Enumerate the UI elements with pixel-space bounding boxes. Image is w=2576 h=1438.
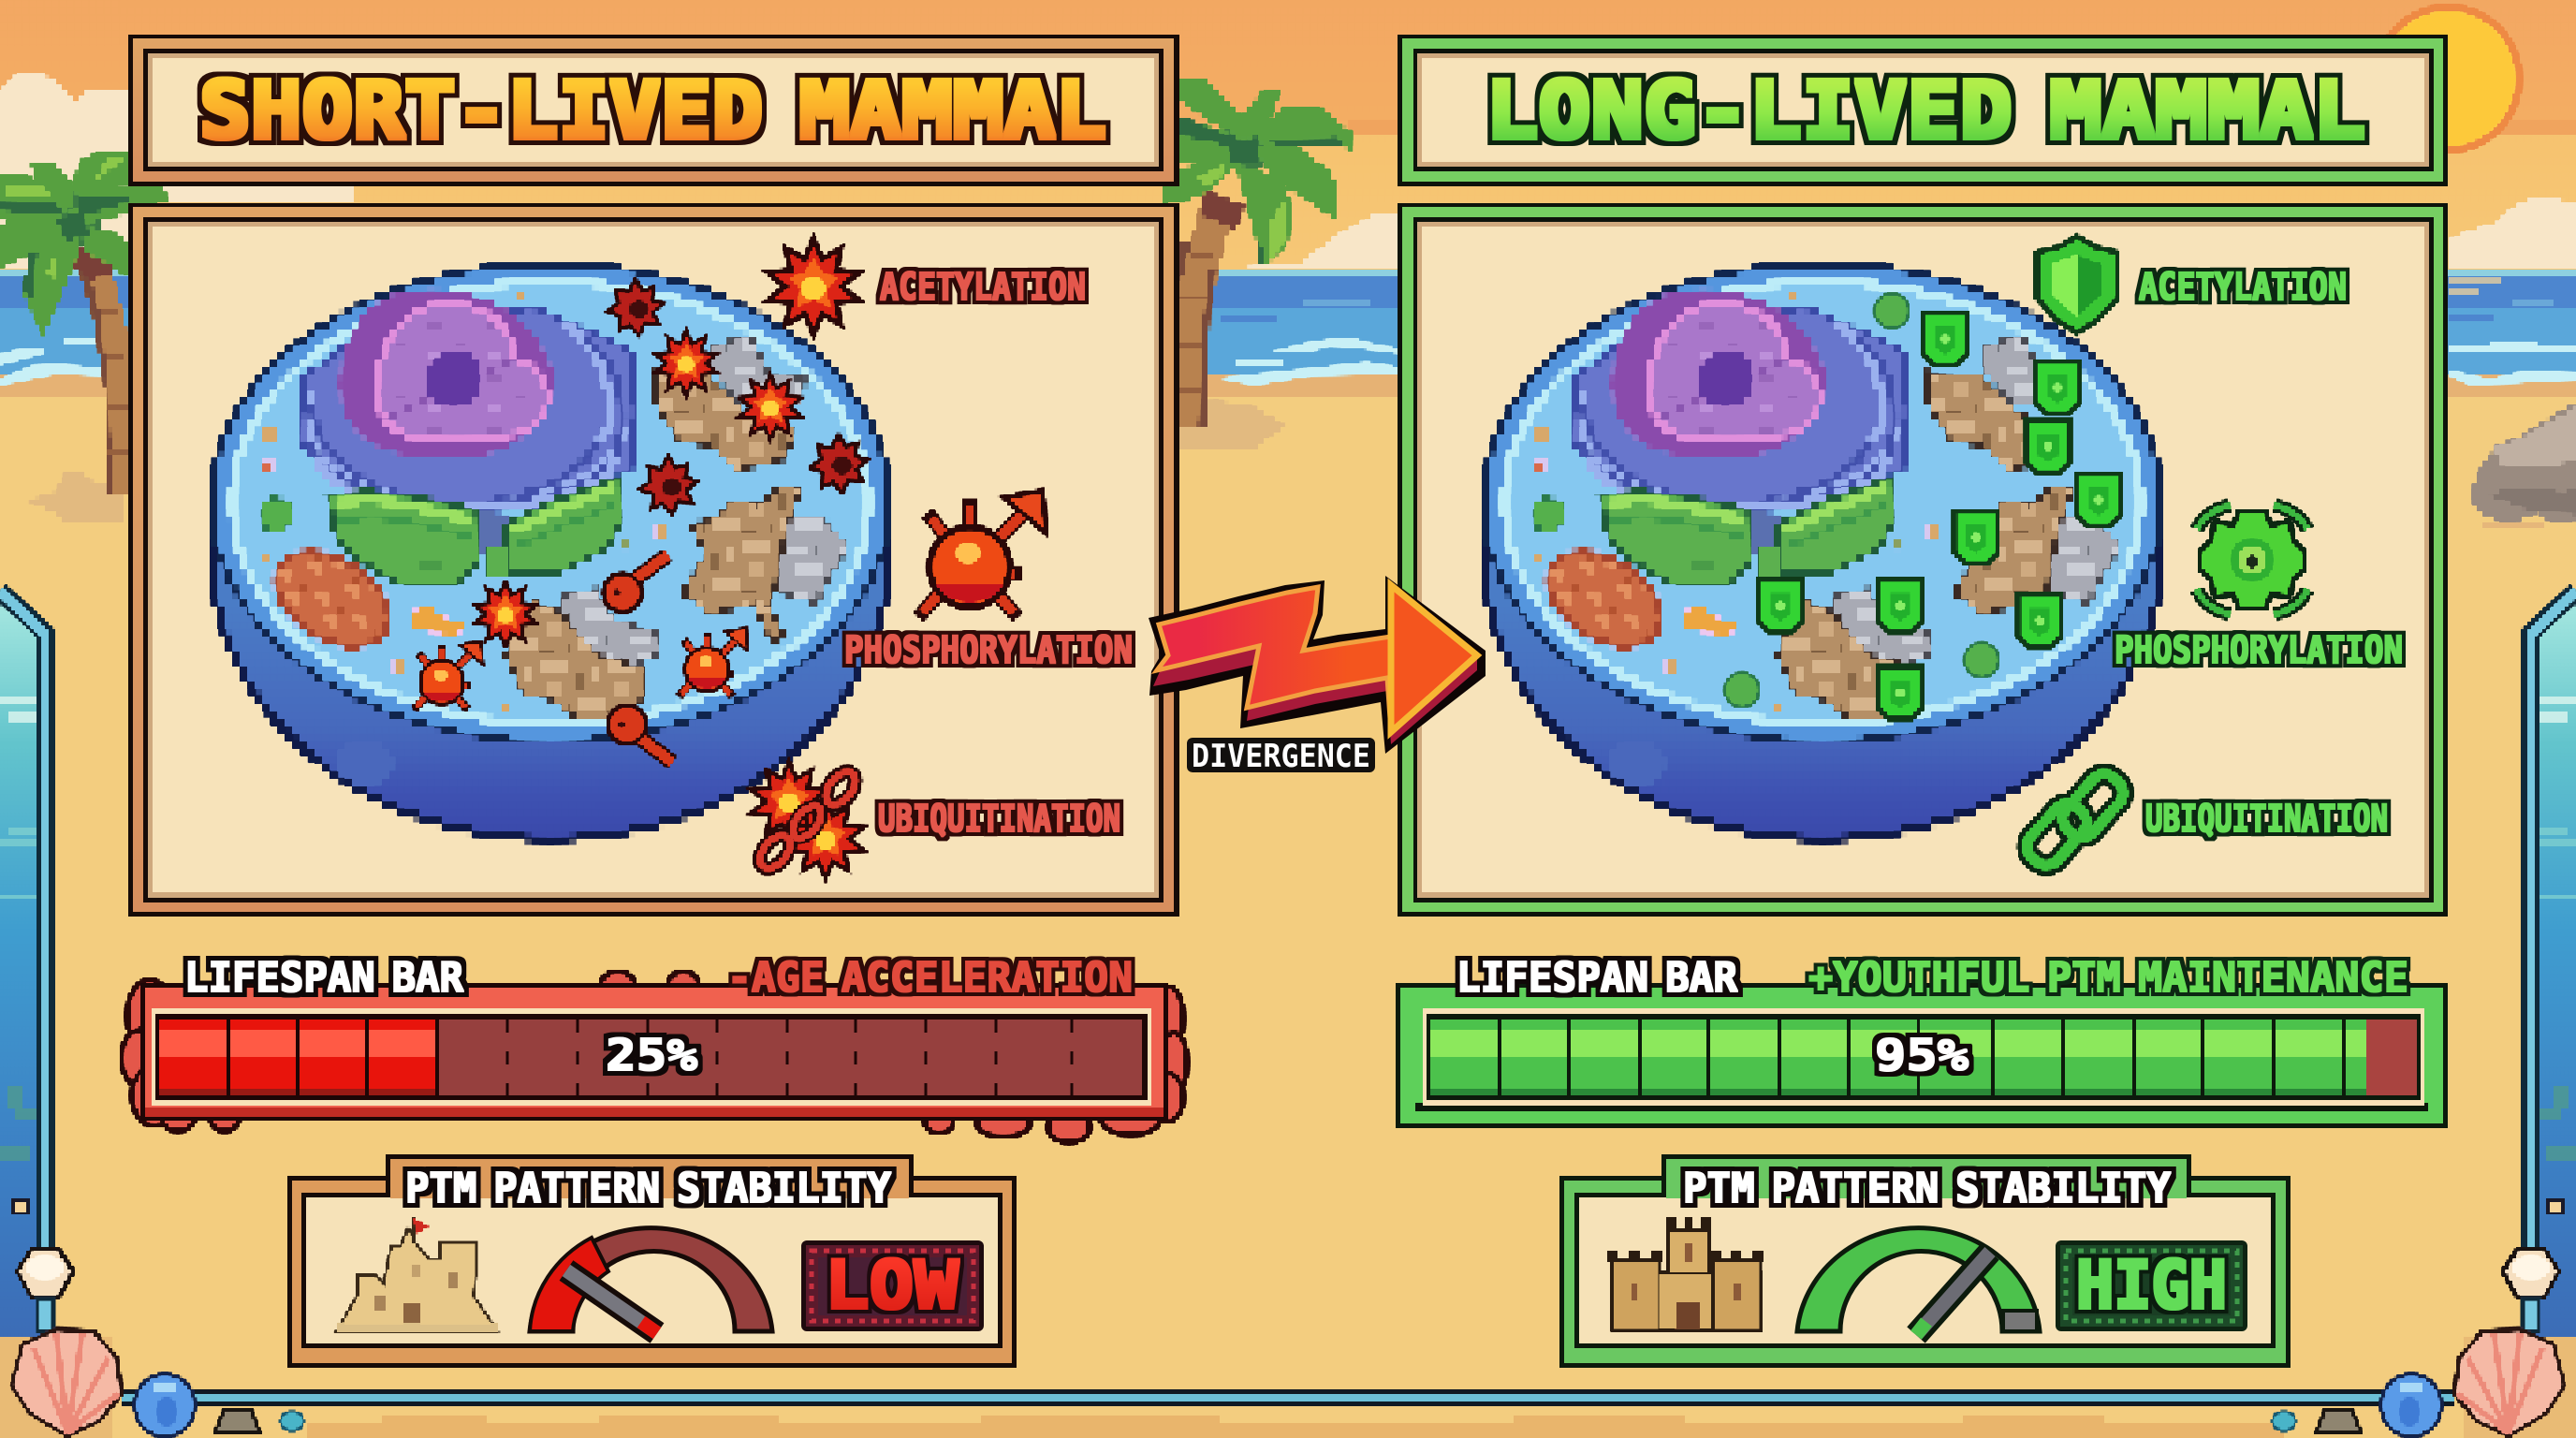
label: acetylation: ACETYLATION xyxy=(880,266,1086,309)
cell illustration: damaged xyxy=(212,264,889,839)
label: age acceleration: -AGE ACCELERATION xyxy=(727,954,1133,1002)
label: ubiquitination: UBIQUITINATION xyxy=(878,798,1120,841)
label: phosphorylation: PHOSPHORYLATION xyxy=(2115,629,2403,672)
label: phosphorylation: PHOSPHORYLATION xyxy=(844,629,1133,672)
title: long-lived mammal: LONG-LIVED MAMMAL xyxy=(1486,65,2365,156)
badge: high xyxy=(2056,1240,2247,1331)
value: 25%: 25% xyxy=(606,1030,697,1080)
clouds xyxy=(0,75,2576,267)
title: long-lived mammal xyxy=(1398,35,2448,186)
bottom water rail xyxy=(122,1389,2454,1406)
value: 95%: 95% xyxy=(1875,1030,1969,1080)
lifespan bar: long-lived xyxy=(1396,954,2448,1128)
icon: acetylation burst xyxy=(768,240,858,333)
label: ubiquitination: UBIQUITINATION xyxy=(2145,798,2388,841)
panel: long-lived cell xyxy=(1398,203,2448,917)
badge: low: LOW xyxy=(825,1247,959,1324)
title: short-lived mammal xyxy=(128,35,1179,186)
gauge: low xyxy=(530,1228,772,1333)
panel: short-lived cell xyxy=(128,203,1179,917)
panel: PTM stability low xyxy=(287,1154,1017,1368)
heading: PTM PATTERN STABILITY xyxy=(405,1165,891,1212)
icon: shield xyxy=(2037,237,2117,332)
label: acetylation: ACETYLATION xyxy=(2139,266,2347,309)
frame lumps xyxy=(122,972,1187,1142)
filled segments xyxy=(159,1020,435,1095)
icon: crumbling sandcastle xyxy=(337,1218,497,1331)
arrow: divergence xyxy=(1149,576,1486,754)
rock xyxy=(2469,403,2576,528)
protective shields and green vesicles xyxy=(1725,294,2120,719)
left decor: side water panel and shells xyxy=(0,592,303,1438)
icon: intact chain xyxy=(2021,768,2130,872)
sea reflections xyxy=(1222,277,2554,322)
heading: PTM PATTERN STABILITY xyxy=(1683,1165,2171,1212)
palm tree right xyxy=(1161,80,1352,449)
title: short-lived mammal: SHORT-LIVED MAMMAL xyxy=(199,65,1106,156)
bottom sand strip xyxy=(309,1416,2284,1438)
badge: high: HIGH xyxy=(2076,1247,2227,1324)
label: lifespan bar: LIFESPAN BAR xyxy=(184,954,463,1002)
sun xyxy=(2373,4,2523,154)
gauge: high xyxy=(1797,1228,2040,1335)
label: divergence: DIVERGENCE xyxy=(1192,738,1370,775)
lifespan bar: short-lived xyxy=(122,954,1187,1142)
panel: PTM stability high xyxy=(1559,1154,2291,1368)
icon: solid castle xyxy=(1608,1218,1764,1329)
icon: gear with brackets xyxy=(2197,506,2307,614)
icon: phosphorylation bug xyxy=(923,491,1046,612)
right decor: side water panel and shells xyxy=(2273,592,2576,1438)
damage markers xyxy=(417,280,867,762)
filled segments xyxy=(1430,1020,2417,1095)
label: lifespan bar: LIFESPAN BAR xyxy=(1456,954,1737,1002)
label: youthful ptm maintenance: +YOUTHFUL PTM MAINTENANCE xyxy=(1808,954,2408,1002)
icon: broken chain xyxy=(753,763,862,877)
badge: low xyxy=(801,1240,984,1331)
palm tree left xyxy=(0,150,170,524)
cell illustration: protected xyxy=(1484,264,2161,839)
sea foam waves xyxy=(0,339,2576,386)
